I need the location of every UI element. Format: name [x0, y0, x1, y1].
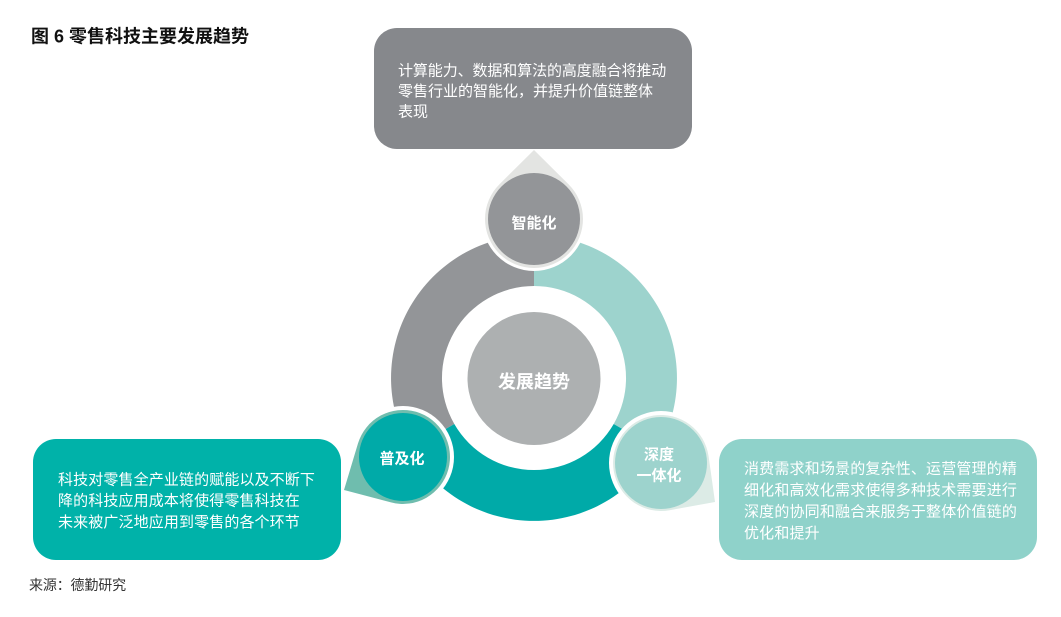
panel: deep integration description: 细化和高效化需求使得多种技术需要进行: [744, 482, 1017, 499]
panel: intelligence description: 计算能力、数据和算法的高度融合将推动: [398, 62, 666, 80]
node: intelligence: 智能化: [511, 214, 557, 232]
panel: adoption description: [33, 439, 341, 560]
node: adoption: [344, 406, 454, 508]
panel: adoption description: 未来被广泛地应用到零售的各个环节: [58, 513, 300, 531]
panel: intelligence description: [374, 28, 692, 149]
node: intelligence: [482, 150, 586, 271]
panel: deep integration description: 深度的协同和融合来服务于整体价值链的: [744, 504, 1017, 520]
node: adoption: 普及化: [379, 450, 425, 468]
center circle: development trends: [468, 312, 600, 445]
panel: adoption description: 科技对零售全产业链的赋能以及不断下: [58, 470, 315, 488]
center circle: development trends: 发展趋势: [498, 371, 570, 392]
panel: intelligence description: 零售行业的智能化，并提升价值链整体: [398, 82, 653, 100]
panel: adoption description: 降的科技应用成本将使得零售科技在: [58, 492, 300, 510]
panel: deep integration description: [719, 439, 1037, 560]
node: deep integration: [609, 411, 715, 515]
node: deep integration: 一体化: [636, 466, 682, 484]
panel: intelligence description: 表现: [398, 104, 428, 120]
title: 图 6 零售科技主要发展趋势: [31, 26, 249, 46]
panel: deep integration description: 消费需求和场景的复杂性、运营管理的精: [744, 460, 1017, 478]
node: deep integration: 深度: [644, 446, 674, 464]
panel: deep integration description: 优化和提升: [744, 525, 820, 542]
source note: 来源：德勤研究: [29, 577, 126, 593]
ring chart: [391, 235, 677, 521]
